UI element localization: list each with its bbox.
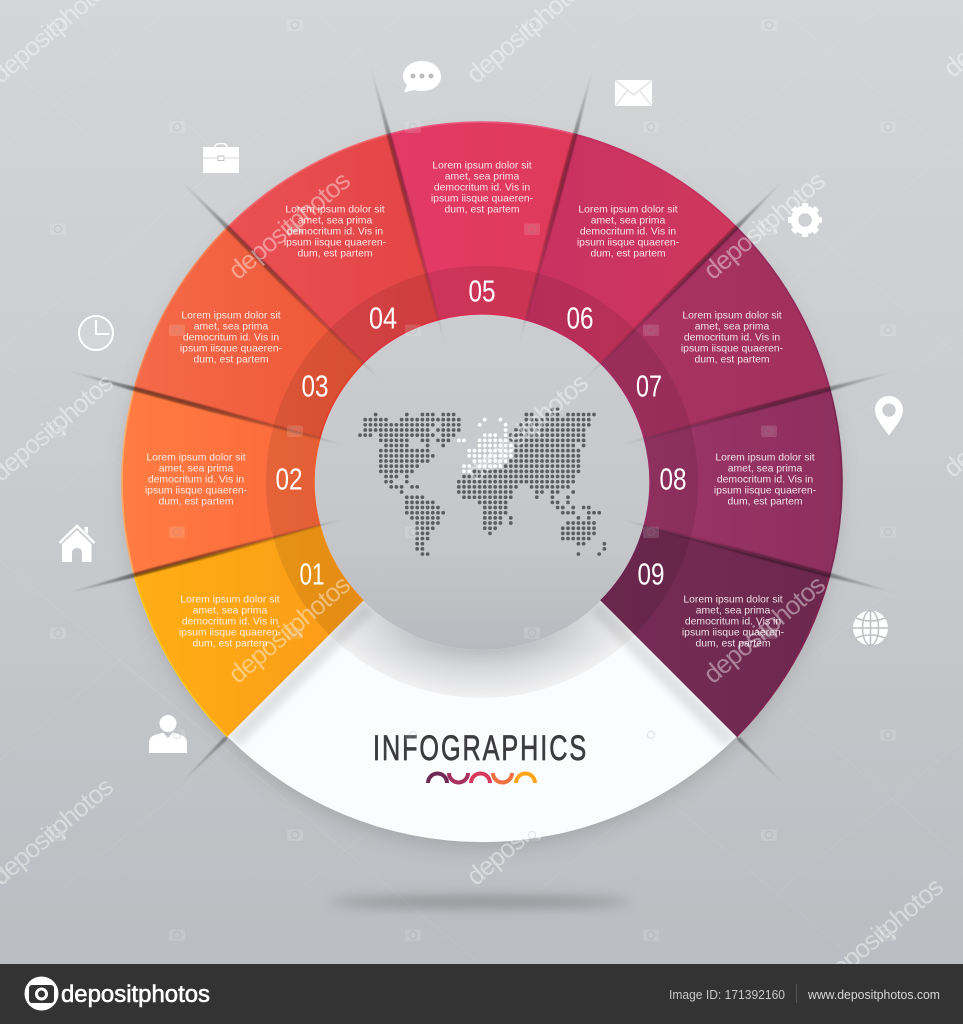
icon: chat bubble xyxy=(403,61,441,92)
text: segment 01: amet, sea prima xyxy=(193,606,267,616)
text: segment 04: democritum id. Vis in xyxy=(287,226,383,238)
text: segment 06: amet, sea prima xyxy=(591,216,665,226)
icon: gear xyxy=(790,206,820,234)
number 05: 05 xyxy=(468,274,496,308)
watermarks: depositphotos xyxy=(460,367,594,487)
watermarks: depositphotos xyxy=(222,569,356,689)
text: segment 08: democritum id. Vis in xyxy=(717,474,813,486)
center disc xyxy=(310,310,654,654)
text: segment 02: amet, sea prima xyxy=(159,464,233,474)
text: segment 08: ipsum iisque quaeren- xyxy=(714,486,816,496)
icon: envelope xyxy=(615,80,652,106)
panel: segment 09 xyxy=(601,526,830,737)
text: segment 07: ipsum iisque quaeren- xyxy=(681,344,783,354)
text: segment 04: Lorem ipsum dolor sit xyxy=(285,204,385,216)
panel: segment 07 xyxy=(601,227,830,438)
text: segment 07: Lorem ipsum dolor sit xyxy=(682,310,782,322)
text: segment 02: ipsum iisque quaeren- xyxy=(145,486,247,496)
title wave ornament xyxy=(428,773,535,783)
text: segment 03: dum, est partem xyxy=(193,354,269,366)
text: segment 07: democritum id. Vis in xyxy=(684,332,780,344)
floating ground shadow xyxy=(330,897,630,907)
segment rim highlights xyxy=(122,122,842,737)
panel: segment 03 xyxy=(134,227,363,438)
icon: map pin xyxy=(875,396,903,436)
text: segment 07: amet, sea prima xyxy=(695,322,769,332)
text: segment 04: ipsum iisque quaeren- xyxy=(284,238,386,248)
text: segment 06: ipsum iisque quaeren- xyxy=(577,238,679,248)
text: segment 01: Lorem ipsum dolor sit xyxy=(180,594,280,606)
text: segment 04: amet, sea prima xyxy=(298,216,372,226)
text: segment 02: democritum id. Vis in xyxy=(148,474,244,486)
text: segment 06: dum, est partem xyxy=(590,248,666,260)
text: segment 05: amet, sea prima xyxy=(445,172,519,182)
icon: home xyxy=(60,526,94,562)
title: INFOGRAPHICS xyxy=(373,729,588,768)
number 09: 09 xyxy=(638,556,664,592)
number 04: 04 xyxy=(369,300,397,336)
text: segment 08: Lorem ipsum dolor sit xyxy=(715,452,815,464)
text: segment 04: dum, est partem xyxy=(297,248,373,260)
panel: segment 06 xyxy=(526,134,737,363)
icon: person xyxy=(149,715,187,753)
panel: segment 04 xyxy=(227,134,438,363)
text: segment 05: ipsum iisque quaeren- xyxy=(431,194,533,204)
text: segment 06: Lorem ipsum dolor sit xyxy=(578,204,678,216)
text: segment 05: Lorem ipsum dolor sit xyxy=(432,160,532,172)
watermarks: depositphotos xyxy=(815,871,949,991)
number 08: 08 xyxy=(660,462,686,496)
number 01: 01 xyxy=(300,556,324,592)
number 03: 03 xyxy=(302,368,328,404)
footer bar xyxy=(0,964,963,1024)
footer site url: www.depositphotos.com xyxy=(807,988,940,1002)
icon: clock xyxy=(79,316,113,350)
white title sector xyxy=(227,601,737,842)
text: segment 09: dum, est partem xyxy=(695,638,771,650)
text: segment 01: democritum id. Vis in xyxy=(182,616,278,628)
text: segment 08: amet, sea prima xyxy=(728,464,802,474)
text: segment 05: dum, est partem xyxy=(444,204,520,216)
dark continents xyxy=(360,409,604,554)
text: segment 03: ipsum iisque quaeren- xyxy=(180,344,282,354)
watermarks: depositphotos xyxy=(697,569,831,689)
footer image id: Image ID: 171392160 xyxy=(669,988,785,1002)
watermarks: depositphotos xyxy=(222,165,356,285)
text: segment 08: dum, est partem xyxy=(727,496,803,508)
number 06: 06 xyxy=(566,300,594,336)
panel: segment 05 xyxy=(389,122,575,320)
footer logo icon xyxy=(24,976,58,1010)
text: segment 02: Lorem ipsum dolor sit xyxy=(146,452,246,464)
watermarks: depositphotos xyxy=(460,771,594,891)
icon: briefcase xyxy=(203,144,239,173)
text: segment 02: dum, est partem xyxy=(158,496,234,508)
footer logo wordmark: depositphotos xyxy=(61,981,210,1008)
number band overlay xyxy=(266,266,698,635)
text: segment 05: democritum id. Vis in xyxy=(434,182,530,194)
panel: segment 01 xyxy=(134,526,363,737)
text: segment 09: democritum id. Vis in xyxy=(685,616,781,628)
ring drop shadow xyxy=(125,133,839,847)
text: segment 03: democritum id. Vis in xyxy=(183,332,279,344)
icon: globe xyxy=(853,610,888,646)
text: segment 06: democritum id. Vis in xyxy=(580,226,676,238)
boundary shadows xyxy=(64,64,900,789)
text: segment 01: ipsum iisque quaeren- xyxy=(179,628,281,638)
number 02: 02 xyxy=(276,462,302,496)
text: segment 03: amet, sea prima xyxy=(194,322,268,332)
number 07: 07 xyxy=(636,368,662,404)
text: segment 09: Lorem ipsum dolor sit xyxy=(683,594,783,606)
panel: segment 02 xyxy=(122,389,320,575)
text: segment 09: ipsum iisque quaeren- xyxy=(682,628,784,638)
text: segment 03: Lorem ipsum dolor sit xyxy=(181,310,281,322)
world dot map xyxy=(360,409,604,554)
text: segment 07: dum, est partem xyxy=(694,354,770,366)
watermark camera marks xyxy=(50,20,896,941)
text: segment 09: amet, sea prima xyxy=(696,606,770,616)
text: segment 01: dum, est partem xyxy=(192,638,268,650)
watermarks: depositphotos xyxy=(697,165,831,285)
highlighted europe dots xyxy=(459,420,511,471)
panel: segment 08 xyxy=(644,389,842,575)
